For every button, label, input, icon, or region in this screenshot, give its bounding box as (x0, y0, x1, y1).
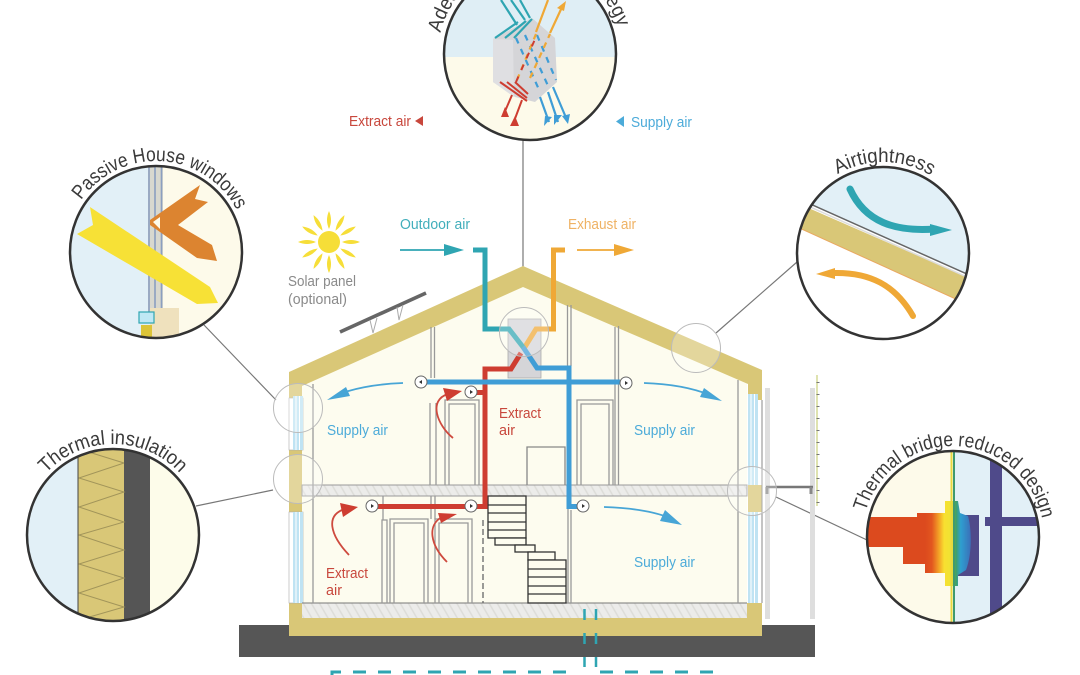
extract arrows (332, 388, 462, 562)
magnifier circles on house (274, 308, 776, 516)
labels: Extract air (349, 114, 411, 130)
labels: Extract (326, 566, 368, 582)
exterior balcony and plant (765, 375, 818, 619)
labels: (optional) (288, 292, 347, 308)
ventilation unit (508, 319, 541, 378)
partitions and doors (313, 305, 738, 603)
outdoor air duct (473, 250, 523, 347)
panel: Thermal insulation (26, 430, 200, 622)
panel: Thermal bridge reduced design (852, 434, 1052, 624)
labels: Outdoor air (400, 217, 470, 233)
panel: Airtightness (796, 148, 970, 340)
ducts (378, 250, 620, 506)
heading: Thermal insulation (36, 430, 186, 472)
diffusers (366, 376, 632, 512)
labels: air (326, 583, 342, 599)
labels: Supply air (327, 423, 388, 439)
connector lines (196, 140, 867, 540)
supply duct (427, 347, 620, 506)
extract duct (378, 353, 521, 506)
house section (289, 266, 762, 636)
ground slab (239, 625, 815, 657)
labels: Exhaust air (568, 217, 636, 233)
labels: Extract (499, 406, 541, 422)
exhaust air arrow (577, 249, 620, 251)
labels: air (499, 423, 515, 439)
left windows (289, 396, 303, 603)
floor slabs (302, 485, 747, 618)
airflow arrows (327, 244, 722, 562)
interior (302, 284, 747, 604)
supply arrows (327, 383, 722, 525)
panel: Passive House windows (68, 148, 245, 340)
sun icon (287, 200, 371, 284)
roof and walls (289, 266, 762, 450)
labels: Supply air (634, 423, 695, 439)
labels (288, 114, 695, 599)
labels: Solar panel (288, 274, 356, 290)
stairs (488, 496, 566, 603)
heading: Airtightness (836, 148, 934, 174)
heading: Passive House windows (71, 148, 245, 208)
right windows (748, 394, 762, 603)
exhaust duct (523, 250, 565, 350)
heading: Thermal bridge reduced design (852, 434, 1052, 518)
outdoor air arrow (400, 249, 450, 251)
panel: ventilation strategy circle (428, 0, 628, 142)
underground duct (332, 609, 720, 675)
legend triangles (415, 116, 624, 127)
labels: Supply air (634, 555, 695, 571)
solar panel on roof (340, 293, 426, 333)
labels: Supply air (631, 115, 692, 131)
